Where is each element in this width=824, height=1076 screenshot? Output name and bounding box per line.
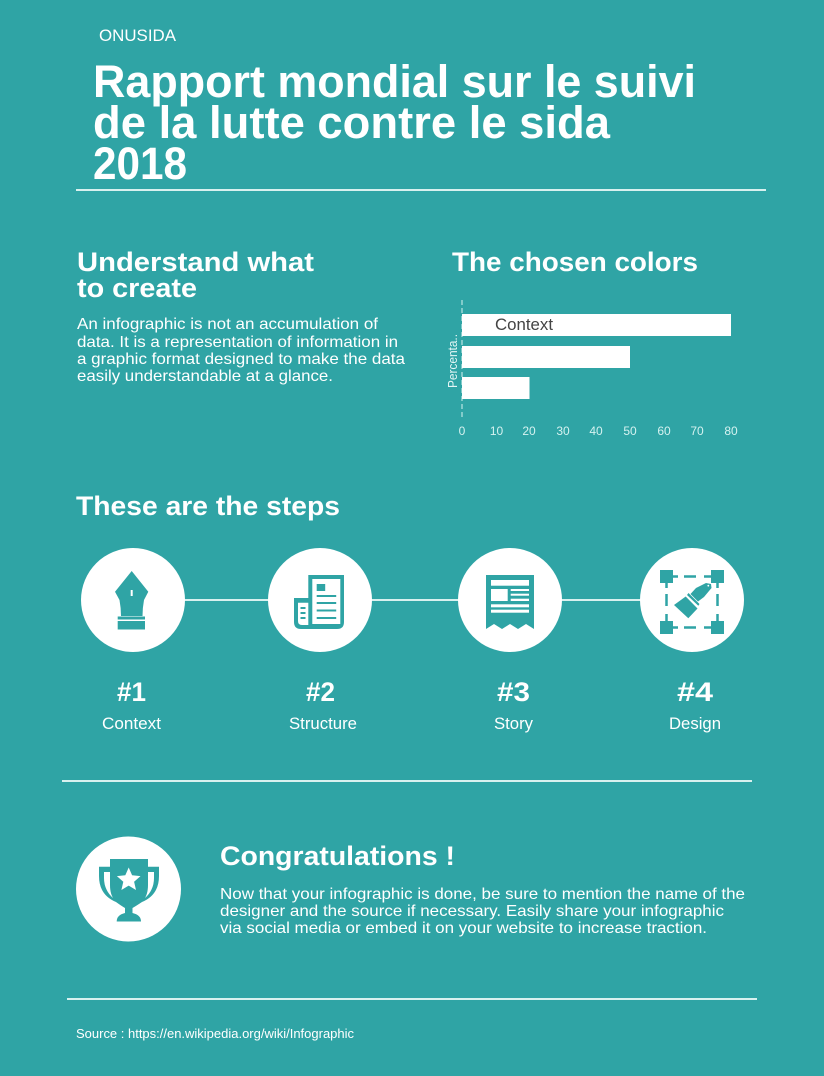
icon: newspaper [294,575,344,629]
heading: understand: to create [77,273,197,303]
text block: definition [77,316,405,385]
organisation label: ONUSIDA [99,27,176,45]
axis labels: 70 [690,424,704,438]
axis labels [459,424,738,438]
title: de la lutte contre le sida [93,97,611,148]
step 2: structure [268,548,372,733]
panel: the chosen colors [446,247,738,438]
axis labels: 0 [459,424,466,438]
axis labels: 50 [623,424,637,438]
step label: Structure [289,715,357,733]
bar: second [462,346,630,368]
step number: #3 [497,677,530,707]
text block: closing note: designer and the source if necessary. Easily share your infographic [220,903,724,920]
bar: context: Context [495,316,553,334]
text block: closing note: Now that your infographic is done, be sure to mention the name of the [220,886,745,903]
title [93,56,696,189]
panel: understand what to create [77,247,405,385]
axis labels: 80 [724,424,738,438]
heading: congratulations: Congratulations ! [220,841,455,871]
source line: Source : https://en.wikipedia.org/wiki/Infographic [76,1026,354,1041]
text block: closing note: via social media or embed it on your website to increase traction. [220,920,707,937]
axis title: Percenta.. [446,334,460,388]
title: Rapport mondial sur le suivi [93,56,696,107]
axis labels: 60 [657,424,671,438]
axis labels: 40 [589,424,603,438]
step label: Context [102,715,161,733]
step number: #2 [306,677,335,707]
step 1: context [81,548,185,733]
heading: understand: Understand what [77,247,314,277]
text block: definition: easily understandable at a glance. [77,368,333,385]
bar chart [446,300,738,438]
bar: context [462,314,731,336]
title: 2018 [93,138,187,189]
text block: closing note [220,886,745,937]
axis labels: 10 [490,424,503,438]
step number: #4 [677,677,713,707]
step label: Story [494,715,534,733]
axis labels: 30 [556,424,570,438]
icon: pen nib [115,571,148,630]
icon: receipt [486,575,534,629]
step number: #1 [117,677,146,707]
axis labels: 20 [522,424,536,438]
text block: definition: a graphic format designed to make the data [77,351,405,368]
bar: third [462,377,530,399]
text block: definition: data. It is a representation of information in [77,334,398,351]
heading: understand [77,247,314,303]
step 3: story [458,548,562,733]
icon: brush in selection frame [660,570,724,634]
heading: steps: These are the steps [76,491,340,521]
step 4: design [640,548,744,733]
step label: Design [669,715,721,733]
heading: chosen colors: The chosen colors [452,247,698,277]
panel: congratulations [76,836,745,942]
icon: trophy [76,836,181,942]
text block: definition: An infographic is not an accumulation of [77,316,379,333]
